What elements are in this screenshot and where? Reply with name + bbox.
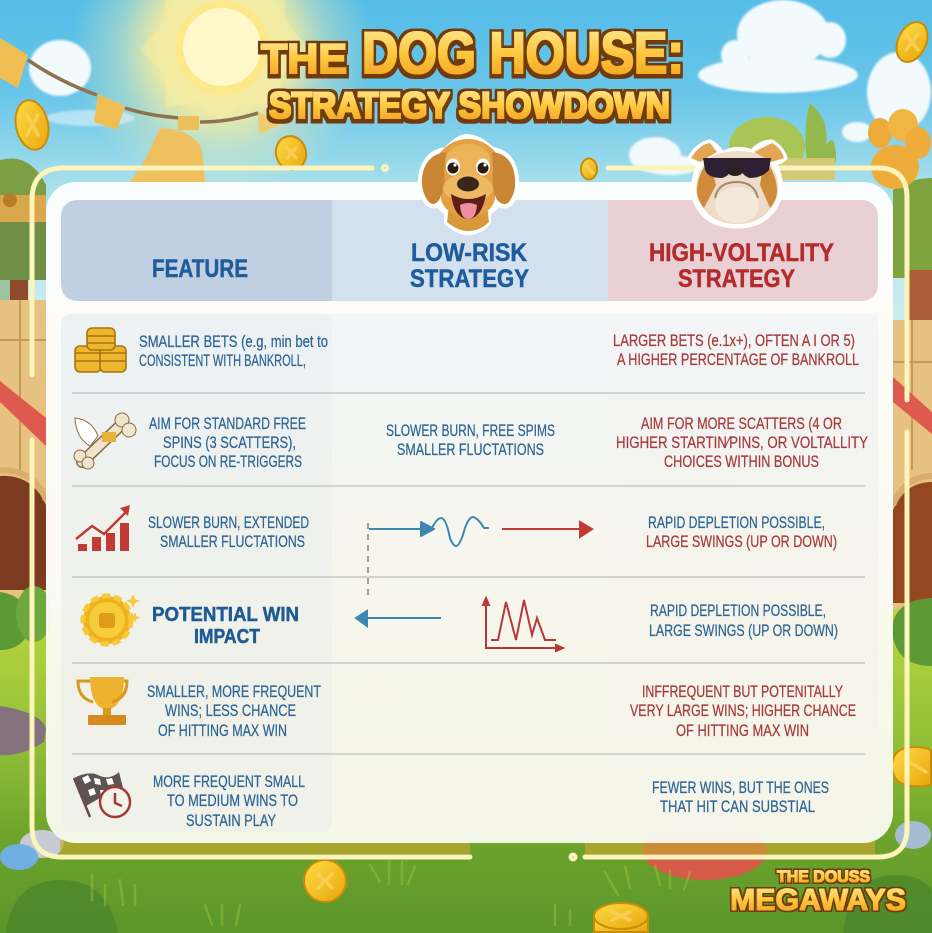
high-volatility text: bankroll swings: LARGE SWINGS (UP OR DOWN) — [646, 532, 837, 551]
feature text: potential win impact — [152, 604, 299, 648]
feature text: free spins — [149, 414, 306, 471]
high-volatility text: bet size: LARGER BETS (e.1x+), OFTEN A I OR 5) — [613, 331, 855, 350]
high-volatility text: win impact: RAPID DEPLETION POSSIBLE, — [650, 601, 826, 620]
high-volatility text: max win — [630, 682, 856, 740]
icon: gold gear coin — [83, 594, 140, 644]
header: low-risk: STRATEGY — [410, 265, 529, 293]
stepping stone and bowls — [0, 679, 931, 880]
high-volatility text: bankroll swings: RAPID DEPLETION POSSIBLE, — [648, 513, 825, 532]
glow beneath frame — [60, 840, 875, 854]
feature text: free spins: AIM FOR STANDARD FREE — [149, 414, 306, 433]
low-risk text: free spins: SLOWER BURN, FREE SPIMS — [386, 421, 555, 440]
left tree — [0, 158, 46, 302]
high-volatility text: free spins: CHOICES WITHIN BONUS — [664, 452, 819, 471]
feature text: sustained play — [153, 772, 305, 830]
header: high-volatility: STRATEGY — [678, 265, 795, 293]
feature text: free spins: FOCUS ON RE-TRIGGERS — [154, 452, 302, 471]
feature text: bankroll swings: SLOWER BURN, EXTENDED — [148, 513, 309, 532]
megaways logo: MEGAWAYS — [730, 882, 906, 917]
low-risk text: free spins — [386, 421, 555, 459]
row 1: bet size — [75, 328, 859, 372]
title: STRATEGY SHOWDOWN — [269, 85, 670, 126]
high-volatility text: bet size — [613, 331, 859, 369]
row 4: potential win impact — [83, 594, 838, 651]
megaways logo: THE DOUSS — [777, 867, 870, 886]
title: DOG HOUSE: — [362, 21, 684, 86]
feature text: bet size: SMALLER BETS (e.g, min bet to — [139, 332, 328, 351]
feature text: free spins: SPINS (3 SCATTERS), — [163, 433, 296, 452]
bulldog mascot with sunglasses — [690, 142, 785, 226]
high-volatility text: max win: OF HITTING MAX WIN — [676, 721, 809, 740]
title — [261, 21, 684, 126]
feature text: bet size: CONSISTENT WITH BANKROLL, — [139, 351, 306, 370]
feature text: max win: WINS; LESS CHANCE — [165, 701, 296, 720]
icon: gold trophy — [78, 677, 127, 725]
shrubs at fence base — [0, 586, 932, 666]
high-volatility text: win impact: LARGE SWINGS (UP OR DOWN) — [649, 621, 838, 640]
sun — [72, 0, 372, 198]
row dividers — [72, 393, 865, 754]
high-volatility text: sustained play — [652, 778, 829, 816]
header: low-risk: LOW-RISK — [411, 239, 527, 267]
high-volatility text: sustained play: FEWER WINS, BUT THE ONES — [652, 778, 829, 797]
title: THE — [261, 35, 347, 82]
red spike chart — [483, 598, 563, 651]
header: high-volatility — [649, 239, 834, 293]
blue left arrow — [356, 611, 441, 626]
blue arrow with wave — [369, 517, 489, 546]
icon: coin stacks — [75, 328, 126, 372]
high-volatility text: sustained play: THAT HIT CAN SUBSTIAL — [660, 797, 815, 816]
feature text: max win — [147, 682, 321, 740]
feature text: potential win impact: POTENTIAL WIN — [152, 604, 299, 626]
foreground grass humps and tufts — [6, 862, 932, 933]
row 6: sustained play — [74, 772, 829, 830]
header: low-risk — [410, 239, 529, 293]
feature text: bet size — [139, 332, 328, 370]
bunting rope and flags — [0, 38, 283, 182]
icon: rising bar chart — [76, 505, 130, 551]
high-volatility text: bankroll swings — [646, 513, 837, 551]
main panel — [46, 182, 893, 843]
row 5: max win — [78, 677, 856, 740]
low-risk text: free spins: SMALLER FLUCTATIONS — [397, 440, 544, 459]
golden dog mascot — [421, 137, 516, 232]
megaways logo — [730, 867, 906, 917]
row 2: free spins — [74, 413, 868, 471]
fence and dog houses — [0, 300, 932, 610]
icon: winged bone — [74, 413, 136, 469]
header: high-volatility: HIGH-VOLTALITY — [649, 239, 834, 267]
feature text: bankroll swings — [148, 513, 309, 551]
feature text: sustained play: MORE FREQUENT SMALL — [153, 772, 305, 791]
header: feature: FEATURE — [152, 255, 248, 283]
red arrow — [502, 522, 592, 537]
right bushes and paw — [729, 103, 932, 320]
row 3: bankroll swings — [76, 505, 837, 597]
feature text: max win: OF HITTING MAX WIN — [158, 721, 287, 740]
high-volatility text: max win: VERY LARGE WINS; HIGHER CHANCE — [630, 701, 856, 720]
dashed connector — [367, 523, 369, 597]
grass field — [0, 610, 932, 933]
icon: checkered flag and clock — [74, 772, 130, 817]
feature text: sustained play: SUSTAIN PLAY — [186, 811, 276, 830]
feature text: potential win impact: IMPACT — [194, 626, 260, 648]
feature text: bankroll swings: SMALLER FLUCTATIONS — [160, 532, 305, 551]
high-volatility text: win impact — [649, 601, 838, 640]
high-volatility text: free spins: HIGHER STARTIN⁄PINS, OR VOLTALLITY — [616, 433, 868, 452]
feature text: sustained play: TO MEDIUM WINS TO — [167, 791, 298, 810]
high-volatility text: max win: INFFREQUENT BUT POTENITALLY — [642, 682, 843, 701]
high-volatility text: free spins — [616, 414, 868, 471]
header row — [61, 200, 878, 301]
high-volatility text: free spins: AIM FOR MORE SCATTERS (4 OR — [641, 414, 842, 433]
clouds — [29, 0, 931, 175]
decorative frame — [32, 166, 907, 859]
feature text: max win: SMALLER, MORE FREQUENT — [147, 682, 321, 701]
